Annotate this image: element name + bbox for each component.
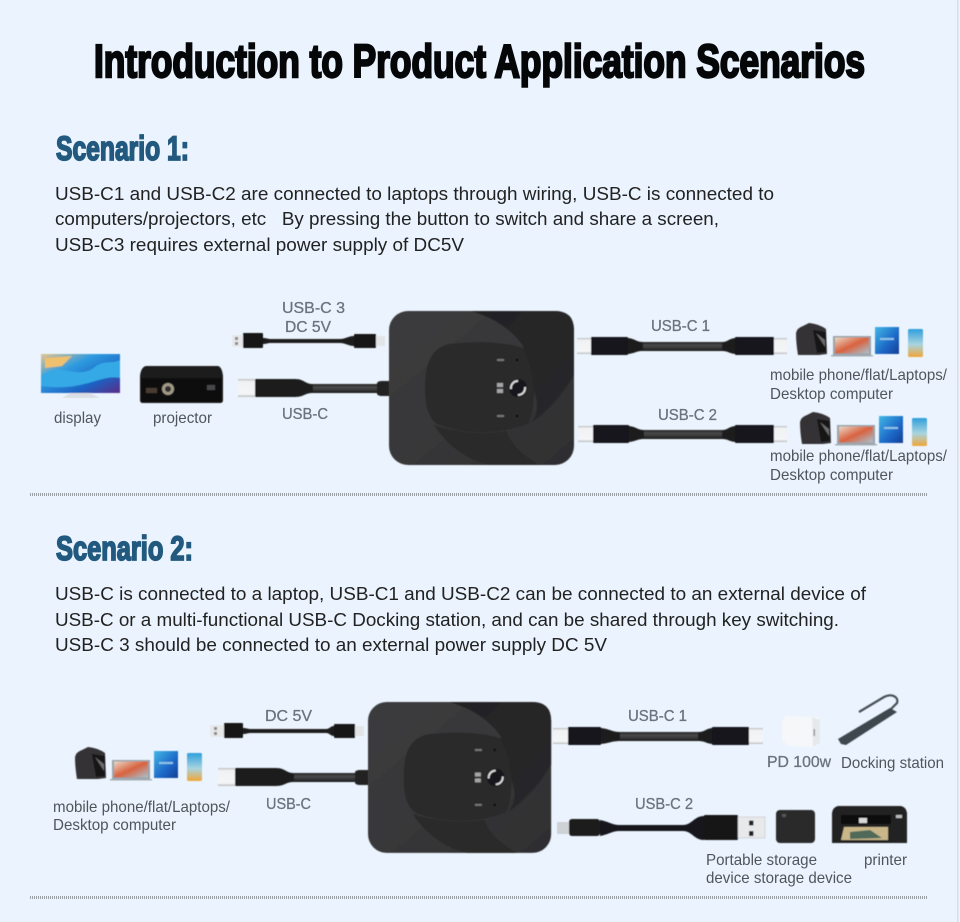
cable: DC 5V power	[210, 723, 364, 738]
icon: display	[41, 354, 120, 398]
cable: USB-C to USB-A	[557, 815, 765, 840]
icons: devices left	[75, 747, 202, 781]
label: USB-C 2: USB-C 2	[658, 407, 717, 424]
label: projector: projector	[153, 410, 213, 427]
icons: devices row 1	[796, 323, 923, 357]
text block: scenario 1 description	[55, 183, 774, 255]
icon: projector	[140, 366, 223, 403]
panel: scenario 1 diagram	[41, 300, 948, 484]
cable: USB-C to display	[238, 379, 390, 397]
panel: scenario 2 diagram	[53, 695, 944, 887]
label: USB-C: USB-C	[266, 796, 311, 813]
text block: scenario 1 description: USB-C3 requires external power supply of DC5V	[55, 234, 465, 255]
cable: USB-C 1	[553, 727, 763, 745]
label: Docking station: Docking station	[841, 755, 944, 772]
label: printer: printer	[864, 852, 908, 869]
label: USB-C 1: USB-C 1	[651, 318, 710, 335]
icons: devices row 2	[800, 412, 927, 446]
heading: scenario 2: Scenario 2:	[56, 530, 193, 568]
label: USB-C 3 DC 5V	[282, 300, 345, 336]
cable: USB-C 3 power	[232, 333, 385, 348]
text block: scenario 1 description: computers/projectors, etc By pressing the button to switch and share a screen,	[55, 208, 719, 229]
label: USB-C 2: USB-C 2	[635, 796, 693, 813]
text block: scenario 1 description: USB-C1 and USB-C2 are connected to laptops through wiring, USB-C is connected to	[55, 183, 774, 204]
label: portable storage: Portable storage	[706, 852, 817, 869]
label: PD 100w: PD 100w	[767, 754, 831, 771]
cable: USB-C 1	[577, 337, 787, 355]
label: devices row 2: mobile phone/flat/Laptops/	[770, 448, 948, 465]
label: display: display	[54, 410, 101, 427]
text block: scenario 2 description: USB-C or a multi-functional USB-C Docking station, and can be shared through key switching.	[55, 609, 839, 630]
icon: docking station	[838, 695, 897, 745]
label: devices row 2	[770, 448, 948, 484]
icon: portable storage	[776, 810, 815, 843]
label: devices row 1	[770, 367, 948, 403]
label: DC 5V: DC 5V	[265, 708, 312, 725]
device: switch hub 2	[368, 702, 551, 853]
cable: USB-C to computer	[218, 768, 369, 786]
icon: charger	[782, 716, 820, 747]
label: USB-C 1: USB-C 1	[628, 708, 687, 725]
label: portable storage	[706, 852, 852, 887]
label: devices row 2: Desktop computer	[770, 467, 894, 484]
label: USB-C: USB-C	[282, 406, 328, 423]
text block: scenario 2 description: USB-C is connected to a laptop, USB-C1 and USB-C2 can be connected to an external device of	[55, 583, 867, 604]
device: switch hub 1	[389, 311, 574, 465]
label: devices row 1: Desktop computer	[770, 386, 894, 403]
label: portable storage: device storage device	[706, 870, 852, 887]
label: USB-C 3 DC 5V: USB-C 3	[282, 300, 345, 317]
label: USB-C 3 DC 5V: DC 5V	[285, 319, 331, 336]
heading: scenario 1: Scenario 1:	[56, 130, 189, 168]
label: devices left: Desktop computer	[53, 817, 177, 834]
label: devices left: mobile phone/flat/Laptops/	[53, 799, 231, 816]
label: devices row 1: mobile phone/flat/Laptops/	[770, 367, 948, 384]
label: devices left	[53, 799, 231, 834]
text block: scenario 2 description: USB-C 3 should be connected to an external power supply DC 5V	[55, 634, 608, 655]
icon: printer	[832, 806, 907, 843]
cable: USB-C 2	[578, 425, 787, 443]
text block: scenario 2 description	[55, 583, 867, 655]
